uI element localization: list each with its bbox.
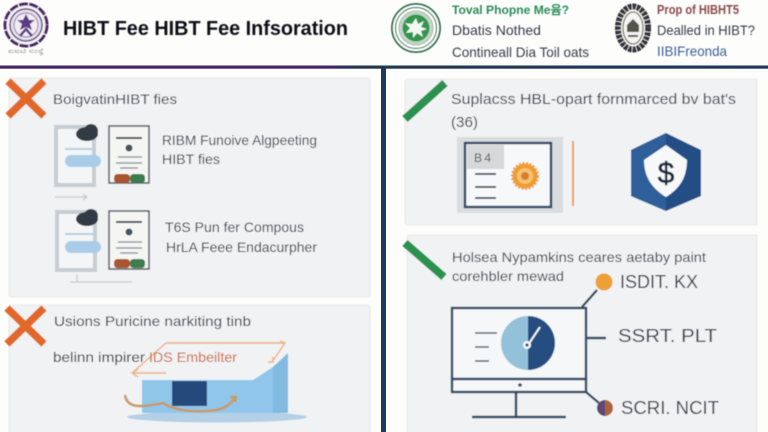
callout: ISDIT. KX: [582, 271, 698, 307]
icon: dollar shield: [631, 133, 701, 211]
text: item 1: RIBM Funoive Algpeeting: [162, 132, 317, 148]
callout: SSRT. PLT: [587, 325, 717, 346]
callout: SCRI. NCIT: SCRI. NCIT: [621, 397, 719, 418]
header rule: [0, 66, 768, 69]
property text block: [657, 3, 755, 59]
icon: orange cross: [8, 81, 44, 116]
icon: black seal: [618, 6, 648, 50]
text: second line: belinn impirer: [53, 349, 145, 365]
icon: purple institute seal: [5, 4, 47, 56]
text: item 1: HIBT fies: [162, 151, 220, 167]
callout: SSRT. PLT: SSRT. PLT: [618, 325, 717, 346]
panel: left bottom: [7, 305, 370, 432]
divider: orange: [572, 141, 574, 206]
column divider: [381, 68, 386, 432]
panel heading: Holsea Nypamkins ceares aetaby paint: [452, 249, 706, 265]
callout: SCRI. NCIT: [586, 392, 719, 418]
title: HIBT Fee HIBT Fee Infsoration: [63, 18, 348, 40]
property text block: Prop of HIBHT5: [657, 3, 739, 17]
panel heading: Usions Puricine narkiting tinb: [54, 313, 251, 329]
panel: right bottom: [405, 235, 757, 432]
text: orange highlight: IDS Embeilter: [149, 349, 237, 365]
text: item 2: T6S Pun fer Compous: [165, 219, 304, 235]
panel: left top: [8, 78, 370, 297]
contact text block: Toval Phopne Me윰?: [452, 2, 569, 17]
contact text block: Dbatis Nothed: [452, 22, 541, 38]
text: item 2: HrLA Feee Endacurpher: [166, 239, 317, 255]
icon: dollar shield: $: [658, 157, 675, 190]
header: [5, 2, 755, 60]
icon: green slash: [405, 83, 445, 119]
icon: green slash: [405, 243, 444, 277]
icon: orange cross: [7, 308, 44, 344]
icon: green seal: [392, 4, 440, 52]
panel heading: BoigvatinHIBT fies: [53, 91, 177, 107]
illustration: certificate card: B4: [474, 151, 491, 165]
illustration: certificate card: [457, 137, 563, 213]
callout: ISDIT. KX: ISDIT. KX: [620, 271, 698, 292]
panel heading: (36): [451, 114, 478, 131]
panel: right top: [405, 79, 757, 225]
contact text block: [452, 2, 589, 60]
illustration: document pair 2: [57, 209, 149, 282]
text: item 1: [162, 132, 317, 167]
panel heading: corehbler mewad: [452, 268, 564, 284]
panel heading: [451, 91, 736, 131]
panel heading: Suplacss HBL-opart fornmarced bv bat's: [451, 91, 736, 108]
icon: purple institute seal: ಐಐಟಿ ಸಂಸ್ಥೆ: [8, 49, 44, 56]
contact text block: Contineall Dia Toil oats: [452, 44, 589, 60]
text: item 2: [165, 219, 317, 255]
panel heading: [452, 249, 706, 284]
property text block: Dealled in HIBT?: [657, 22, 755, 38]
property text block: IIBIFreonda: [657, 43, 727, 59]
illustration: monitor with gauge: [452, 308, 586, 417]
illustration: document pair 1: [55, 124, 149, 200]
illustration: blue box with arrows: [125, 341, 307, 422]
